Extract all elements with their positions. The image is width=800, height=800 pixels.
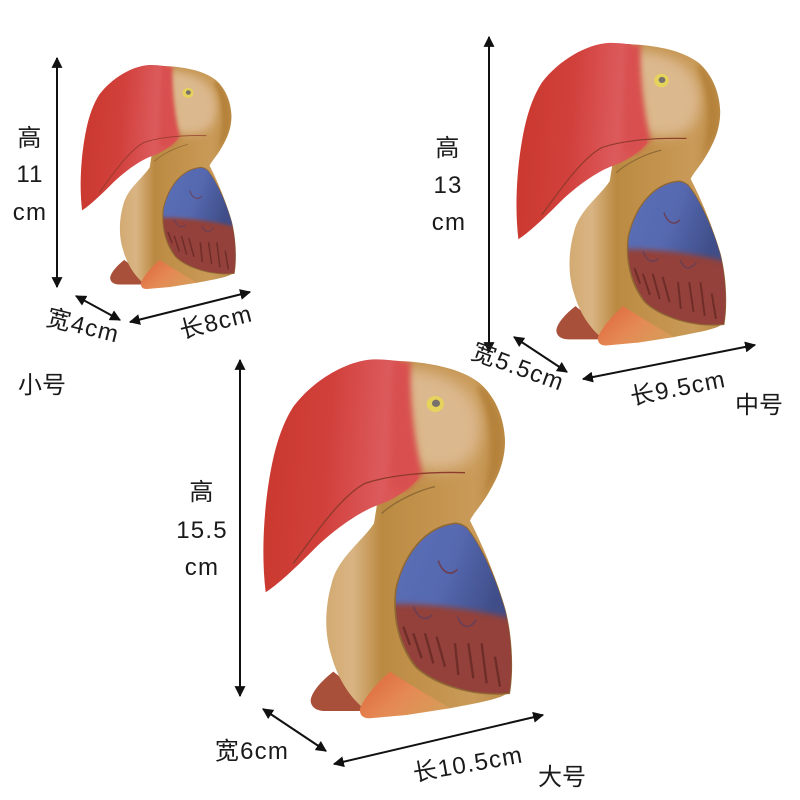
large height label: 高: [189, 479, 215, 506]
small size name: 小号: [18, 372, 66, 399]
small width label: 宽4cm: [44, 304, 122, 349]
large size name: 大号: [538, 764, 586, 791]
large height arrow: [239, 360, 241, 696]
small width arrow: [76, 296, 120, 320]
small height arrow: [56, 58, 58, 287]
medium size name: 中号: [735, 392, 783, 419]
medium bird figurine: [516, 43, 730, 346]
small length arrow: [130, 292, 250, 322]
small height label: 11: [16, 161, 44, 188]
large bird figurine: [263, 359, 517, 718]
large height label: [176, 479, 228, 581]
small height label: [13, 125, 47, 226]
large height label: cm: [185, 554, 219, 581]
medium length label: 长9.5cm: [628, 366, 728, 411]
large width arrow: [263, 709, 326, 751]
small bird figurine: [81, 65, 239, 289]
small height label: 高: [17, 125, 43, 152]
medium length arrow: [583, 345, 755, 379]
small height label: cm: [13, 199, 47, 226]
large width label: 宽6cm: [215, 738, 289, 765]
large height label: 15.5: [176, 517, 228, 544]
medium width arrow: [514, 337, 567, 372]
large length label: 长10.5cm: [411, 742, 525, 787]
medium height arrow: [488, 37, 490, 352]
medium height label: 13: [433, 172, 463, 199]
large length arrow: [334, 715, 543, 764]
medium width label: 宽5.5cm: [468, 338, 568, 397]
medium height label: cm: [432, 209, 466, 236]
medium height label: 高: [435, 135, 461, 162]
medium height label: [432, 135, 466, 236]
small length label: 长8cm: [177, 300, 255, 345]
